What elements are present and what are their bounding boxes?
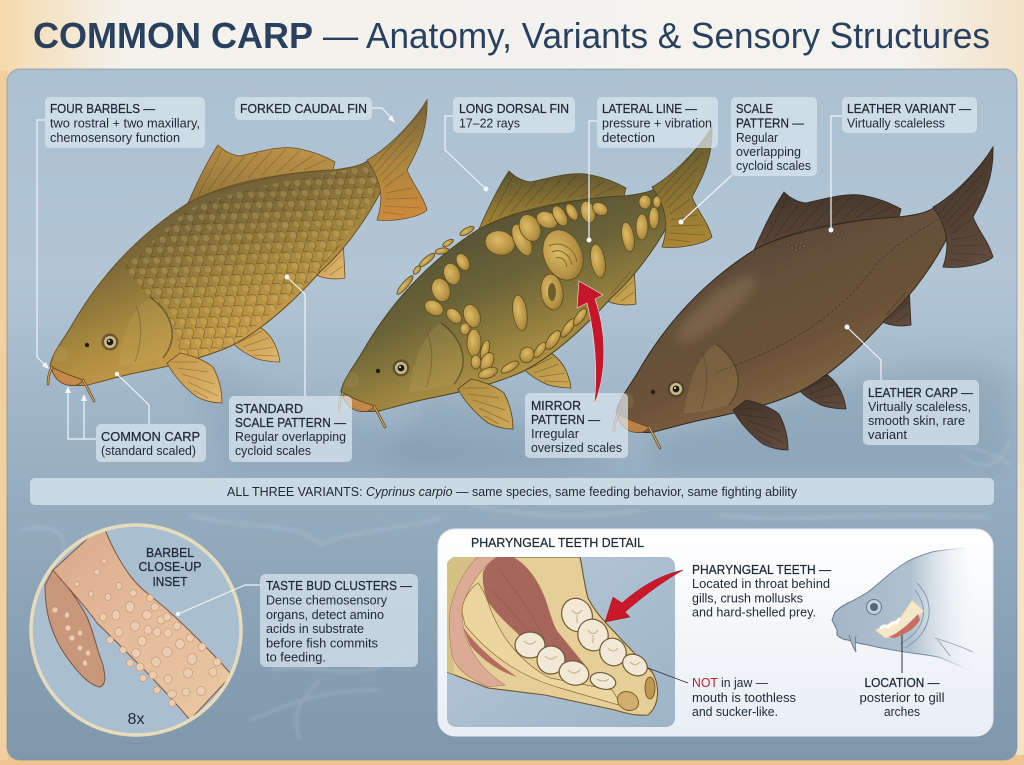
- title: COMMON CARP: [33, 15, 313, 56]
- callout: forked caudal fin: FORKED CAUDAL FIN: [240, 101, 367, 116]
- callout: leather carp: Virtually scaleless,: [868, 399, 971, 414]
- text: pharyngeal teeth: PHARYNGEAL TEETH —: [692, 562, 831, 577]
- callout: mirror pattern: Irregular: [531, 426, 580, 441]
- arrow: red arrow to teeth: [605, 570, 683, 622]
- callout: mirror pattern: PATTERN —: [531, 412, 600, 427]
- banner: all three variants: [30, 478, 994, 505]
- callout: long dorsal fin: [445, 97, 575, 192]
- callout: scale pattern: SCALE: [736, 101, 773, 116]
- callout: leather carp: smooth skin, rare: [868, 413, 965, 428]
- callout: lateral line: detection: [602, 130, 655, 145]
- callout: taste bud clusters: before fish commits: [266, 636, 378, 650]
- callout: leather carp: [844, 324, 979, 445]
- mirror scales: [395, 195, 661, 381]
- callout: lateral line: LATERAL LINE —: [602, 101, 697, 116]
- callout: taste bud clusters: to feeding.: [266, 650, 326, 664]
- callout: scale pattern: PATTERN —: [736, 116, 804, 130]
- panel: pharyngeal teeth detail: [438, 529, 993, 736]
- fish: common carp (standard scaled): [48, 100, 427, 403]
- taste bud bumps: [52, 558, 221, 706]
- callout: common carp: (standard scaled): [101, 443, 196, 458]
- callout: common carp: [65, 372, 206, 462]
- callout: taste bud clusters: acids in substrate: [266, 621, 364, 636]
- callout: mirror pattern: [525, 393, 628, 458]
- text: location: arches: [884, 704, 920, 719]
- callout: taste bud clusters: TASTE BUD CLUSTERS —: [266, 578, 412, 593]
- text: pharyngeal teeth: Located in throat behind: [692, 576, 830, 591]
- callout: leather variant: [828, 97, 977, 232]
- text: pharyngeal teeth: [692, 562, 831, 620]
- callout: long dorsal fin: LONG DORSAL FIN: [459, 101, 569, 116]
- callout: taste bud clusters: Dense chemosensory: [266, 592, 387, 608]
- callout: standard scale pattern: [229, 274, 352, 462]
- banner: all three variants: ALL THREE VARIANTS: Cyprinus carpio — same species, same feeding behavior, same fighting ability: [227, 484, 797, 499]
- callout: standard scale pattern: Regular overlapping: [235, 429, 346, 444]
- text: location: LOCATION —: [864, 675, 940, 690]
- callout: leather variant: Virtually scaleless: [847, 116, 945, 130]
- callout: leather carp: variant: [868, 427, 907, 442]
- jaw illustration: [447, 557, 675, 727]
- callout: standard scale pattern: STANDARD: [235, 401, 303, 416]
- text: pharyngeal teeth: and hard-shelled prey.: [692, 604, 816, 620]
- text: not in jaw: NOT in jaw —: [692, 675, 768, 690]
- callout: scale pattern: [678, 97, 817, 224]
- callout: lateral line: [586, 97, 718, 242]
- callout: lateral line: pressure + vibration: [602, 116, 712, 130]
- callout: leather carp: LEATHER CARP —: [868, 385, 973, 400]
- callout: four barbels: two rostral + two maxillary,: [50, 116, 200, 130]
- heading: pharyngeal teeth detail: PHARYNGEAL TEETH DETAIL: [471, 535, 644, 550]
- inset: barbel close-up: BARBEL: [146, 545, 194, 560]
- inset: barbel close-up: [31, 525, 241, 735]
- main barbel: [53, 525, 232, 720]
- callout: four barbels: FOUR BARBELS —: [50, 101, 155, 116]
- arrow: red mirror pattern arrow: [577, 281, 604, 405]
- callout: taste bud clusters: organs, detect amino: [266, 607, 384, 622]
- callout: four barbels: chemosensory function: [50, 130, 180, 145]
- callout: standard scale pattern: cycloid scales: [235, 443, 311, 458]
- text: not in jaw: and sucker-like.: [692, 704, 778, 719]
- secondary barbel: [45, 570, 105, 687]
- inset: barbel close-up: CLOSE-UP: [138, 559, 202, 574]
- callout: taste bud clusters: [176, 574, 418, 667]
- fish: leather carp: [614, 147, 993, 450]
- inset: barbel close-up: 8x: [128, 711, 144, 728]
- text: not in jaw: mouth is toothless: [692, 690, 796, 705]
- callout: forked caudal fin: [235, 97, 395, 123]
- callout: long dorsal fin: 17–22 rays: [459, 116, 520, 130]
- callout: common carp: COMMON CARP: [101, 429, 200, 444]
- text: location: [860, 675, 945, 719]
- text: not in jaw: [648, 668, 796, 719]
- callout: four barbels: [37, 97, 205, 369]
- title: — Anatomy, Variants & Sensory Structures: [323, 15, 990, 56]
- callout: scale pattern: Regular: [736, 130, 779, 145]
- fish: mirror carp with oversized scales: [339, 127, 712, 429]
- title: [33, 15, 990, 56]
- callout: mirror pattern: MIRROR: [531, 398, 581, 413]
- inset: barbel close-up: INSET: [152, 574, 188, 589]
- callout: leather variant: LEATHER VARIANT —: [847, 101, 971, 116]
- callout: scale pattern: cycloid scales: [736, 158, 811, 173]
- text: location: posterior to gill: [860, 690, 945, 705]
- callout: scale pattern: overlapping: [736, 144, 801, 159]
- fish head location diagram: [832, 548, 990, 673]
- callout: standard scale pattern: SCALE PATTERN —: [235, 415, 346, 430]
- callout: mirror pattern: oversized scales: [531, 440, 622, 455]
- text: pharyngeal teeth: gills, crush mollusks: [692, 590, 803, 606]
